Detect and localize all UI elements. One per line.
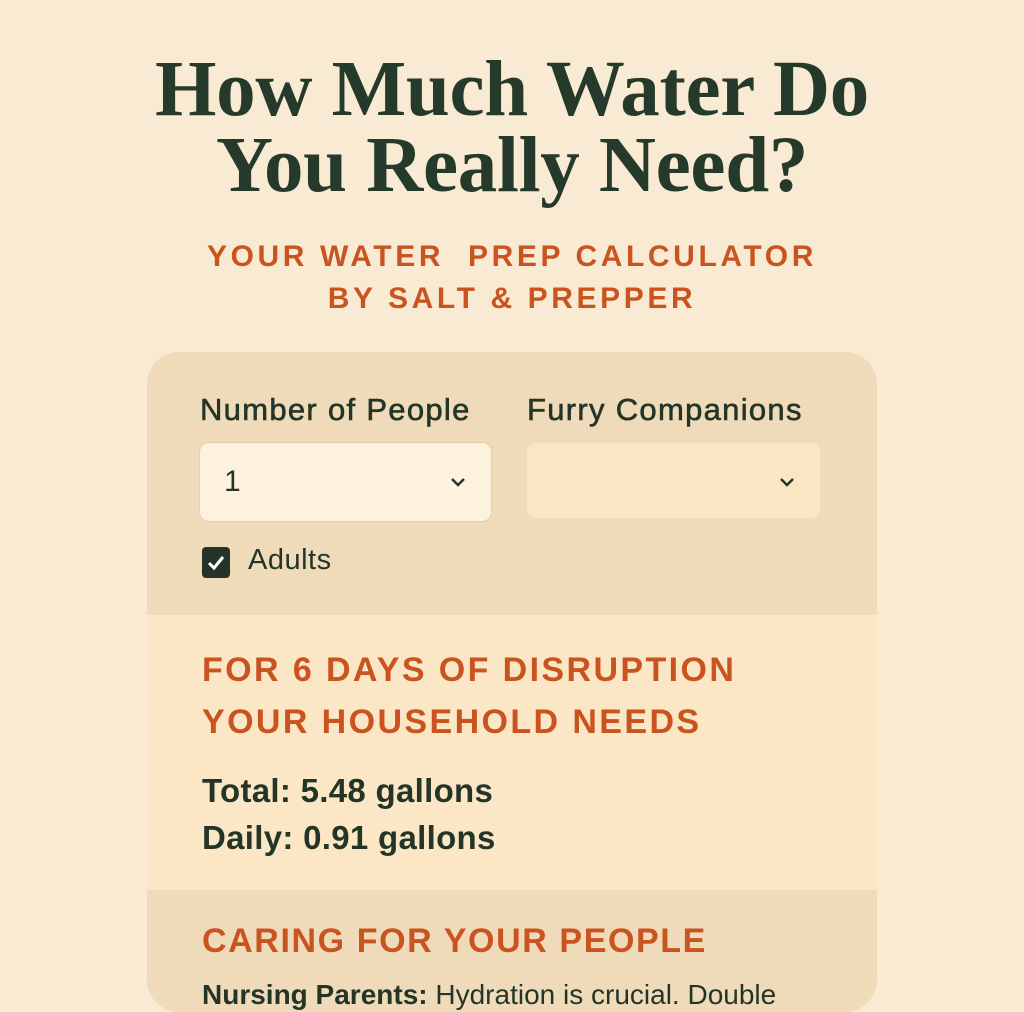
- select: people: [199, 442, 492, 522]
- title: You Really Need?: [216, 122, 808, 209]
- heading: CARING FOR YOUR PEOPLE: [202, 922, 707, 960]
- subtitle: YOUR WATER PREP CALCULATOR: [207, 240, 817, 273]
- label: number of people: Number of People: [200, 392, 471, 427]
- title: How Much Water Do: [155, 46, 869, 133]
- results totals: Total: 5.48 gallons: [202, 772, 493, 809]
- results heading: FOR 6 DAYS OF DISRUPTION: [202, 651, 736, 689]
- results totals: [202, 772, 496, 856]
- panel: caring for your people: [202, 922, 776, 1010]
- panel: calculator card: [147, 352, 877, 1012]
- results heading: [202, 651, 736, 741]
- results heading: YOUR HOUSEHOLD NEEDS: [202, 703, 702, 741]
- select: people: 1: [224, 465, 241, 498]
- checkbox: adults: Adults: [248, 544, 332, 576]
- title: [155, 46, 869, 209]
- checkbox: adults: [202, 544, 332, 578]
- text: Nursing Parents: Hydration is crucial. Double: [202, 979, 776, 1010]
- panel: results: [147, 615, 877, 890]
- label: furry companions: Furry Companions: [527, 392, 803, 427]
- results totals: Daily: 0.91 gallons: [202, 819, 496, 856]
- subtitle: [207, 240, 817, 315]
- subtitle: BY SALT & PREPPER: [328, 282, 696, 315]
- select: companions: [526, 442, 821, 519]
